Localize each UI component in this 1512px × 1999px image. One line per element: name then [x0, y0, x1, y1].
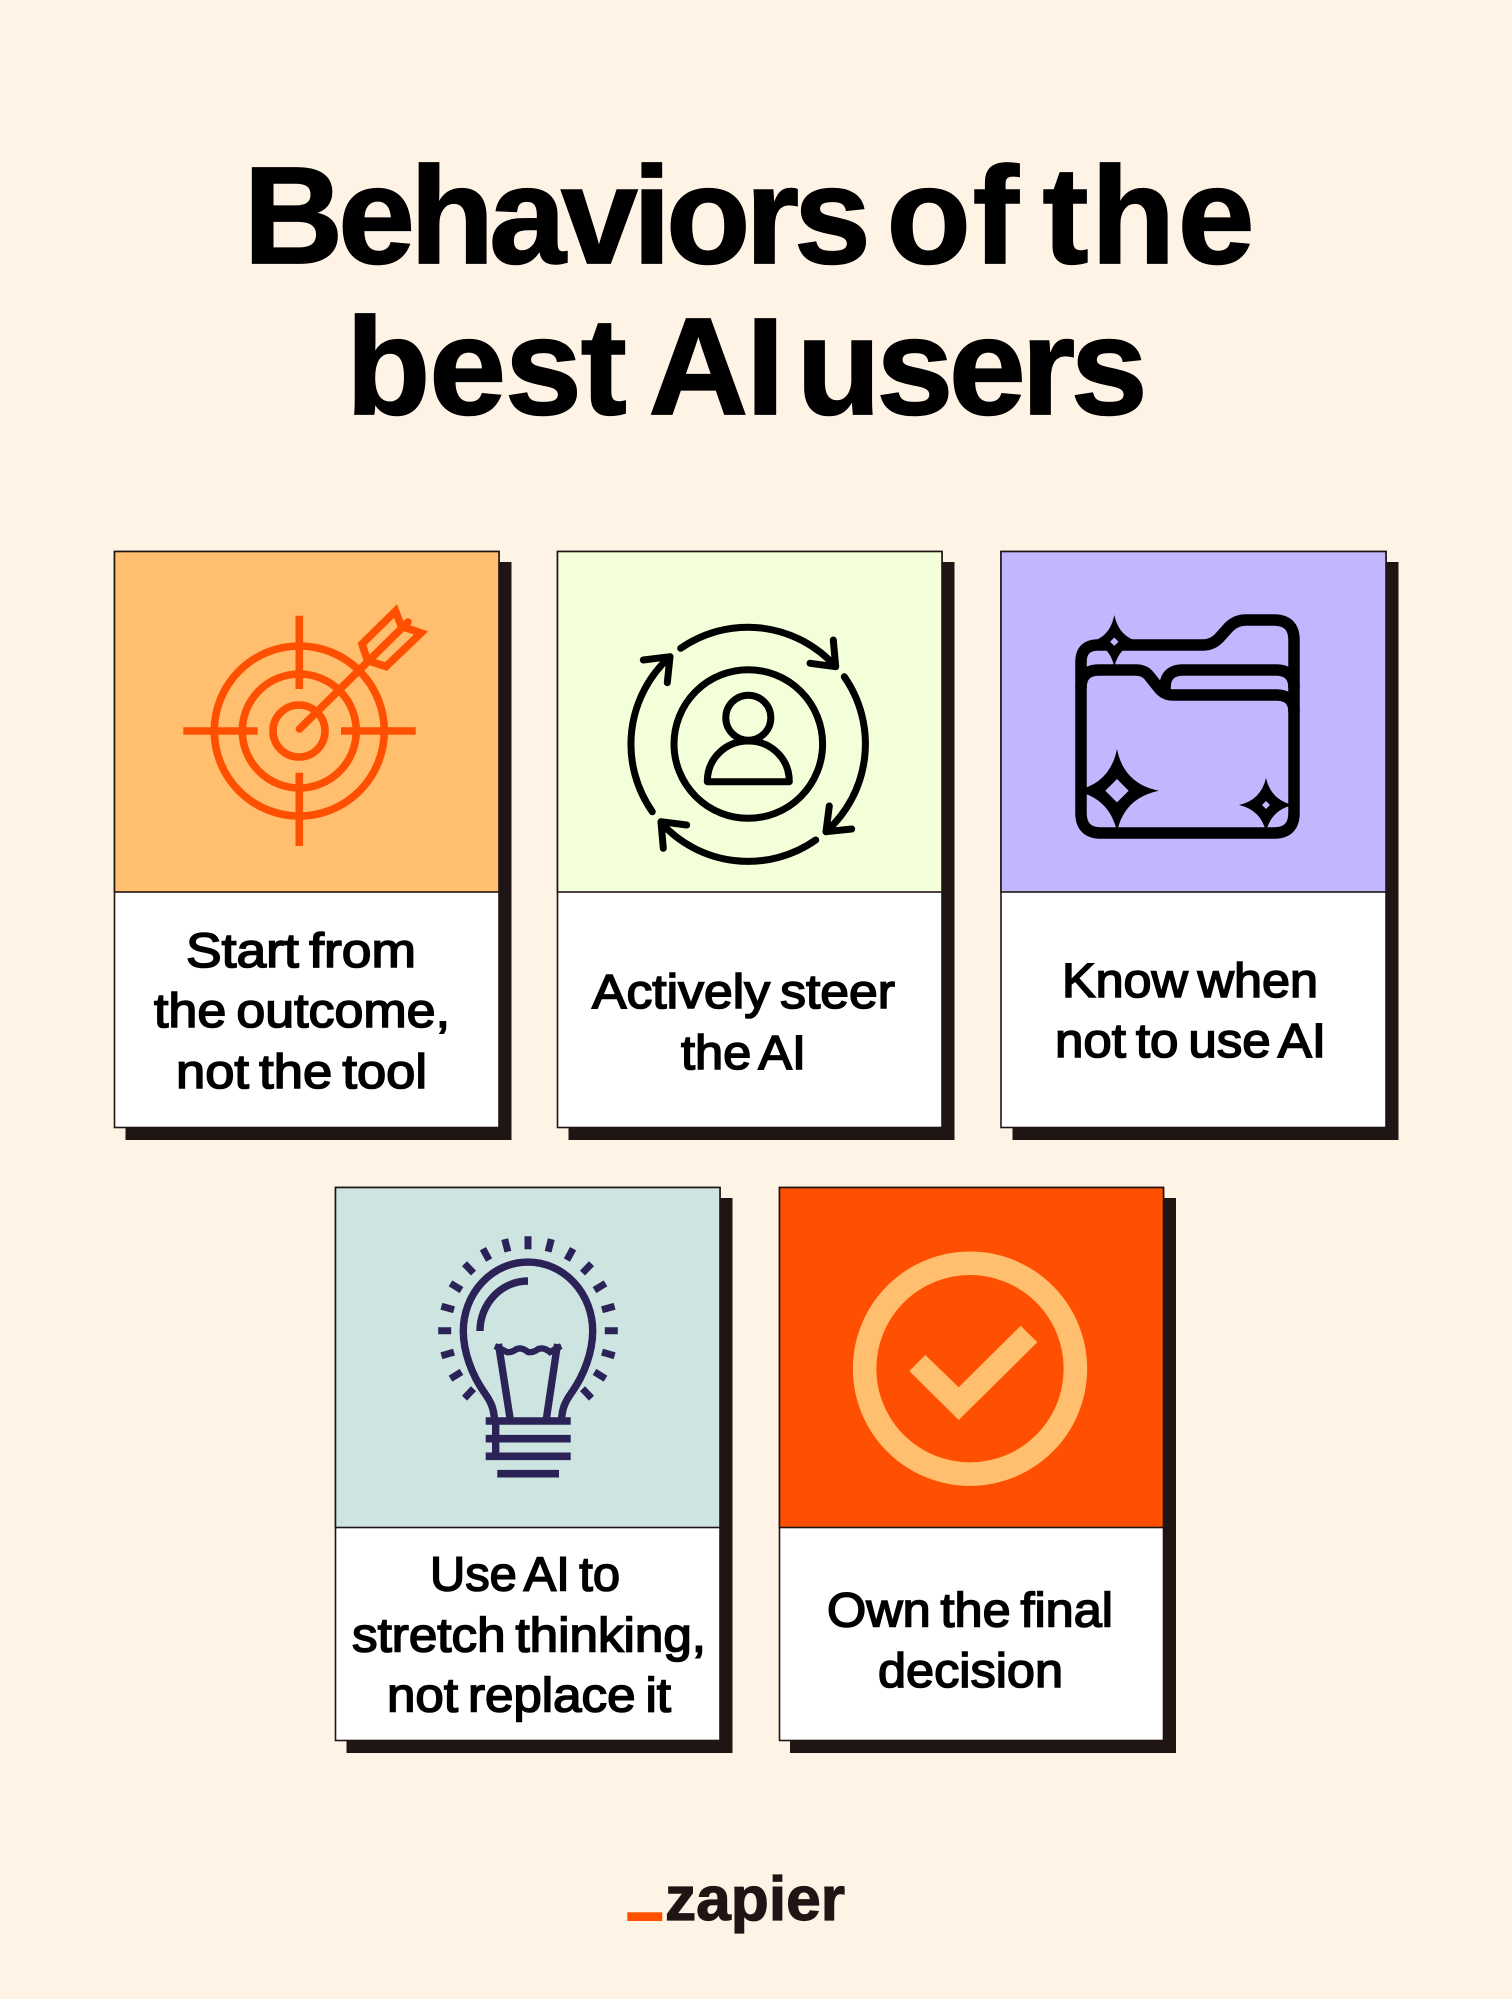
title: best [346, 290, 626, 444]
title: users [796, 290, 1143, 444]
panel: actively steer the AI [558, 552, 954, 1140]
icon: target with arrow [183, 611, 421, 846]
label text: Use AI to [430, 1548, 620, 1602]
panel: start from the outcome [114, 552, 512, 1140]
label text: Actively steer [592, 966, 895, 1019]
label text: Start from [186, 925, 416, 978]
title: Behaviors [244, 139, 866, 293]
panel: own the final decision [780, 1188, 1176, 1753]
logo: zapier: zapier [665, 1865, 845, 1934]
title [244, 139, 1257, 444]
label text: the AI [681, 1027, 806, 1080]
label text: stretch thinking, [352, 1610, 706, 1662]
title: of [886, 139, 1021, 293]
label text [154, 925, 450, 1099]
icon: light bulb [438, 1236, 618, 1474]
label text: the outcome, [154, 985, 450, 1038]
label text: Know when [1062, 955, 1318, 1008]
label text [592, 966, 895, 1080]
label text [827, 1584, 1113, 1698]
panel: know when not to use AI [1001, 552, 1398, 1140]
title: AI [648, 290, 782, 444]
label text [352, 1548, 706, 1722]
title: the [1042, 139, 1257, 293]
icon: check mark in circle [865, 1263, 1075, 1474]
label text: decision [878, 1645, 1063, 1698]
label text [1055, 955, 1326, 1068]
icon: person in cycle arrows [631, 627, 865, 861]
label text: Own the final [827, 1584, 1113, 1638]
icon: folder with sparkles [1075, 615, 1294, 833]
panel: use AI to stretch thinking [336, 1188, 732, 1753]
label text: not the tool [176, 1046, 427, 1099]
label text: not to use AI [1055, 1015, 1326, 1068]
label text: not replace it [387, 1670, 671, 1722]
